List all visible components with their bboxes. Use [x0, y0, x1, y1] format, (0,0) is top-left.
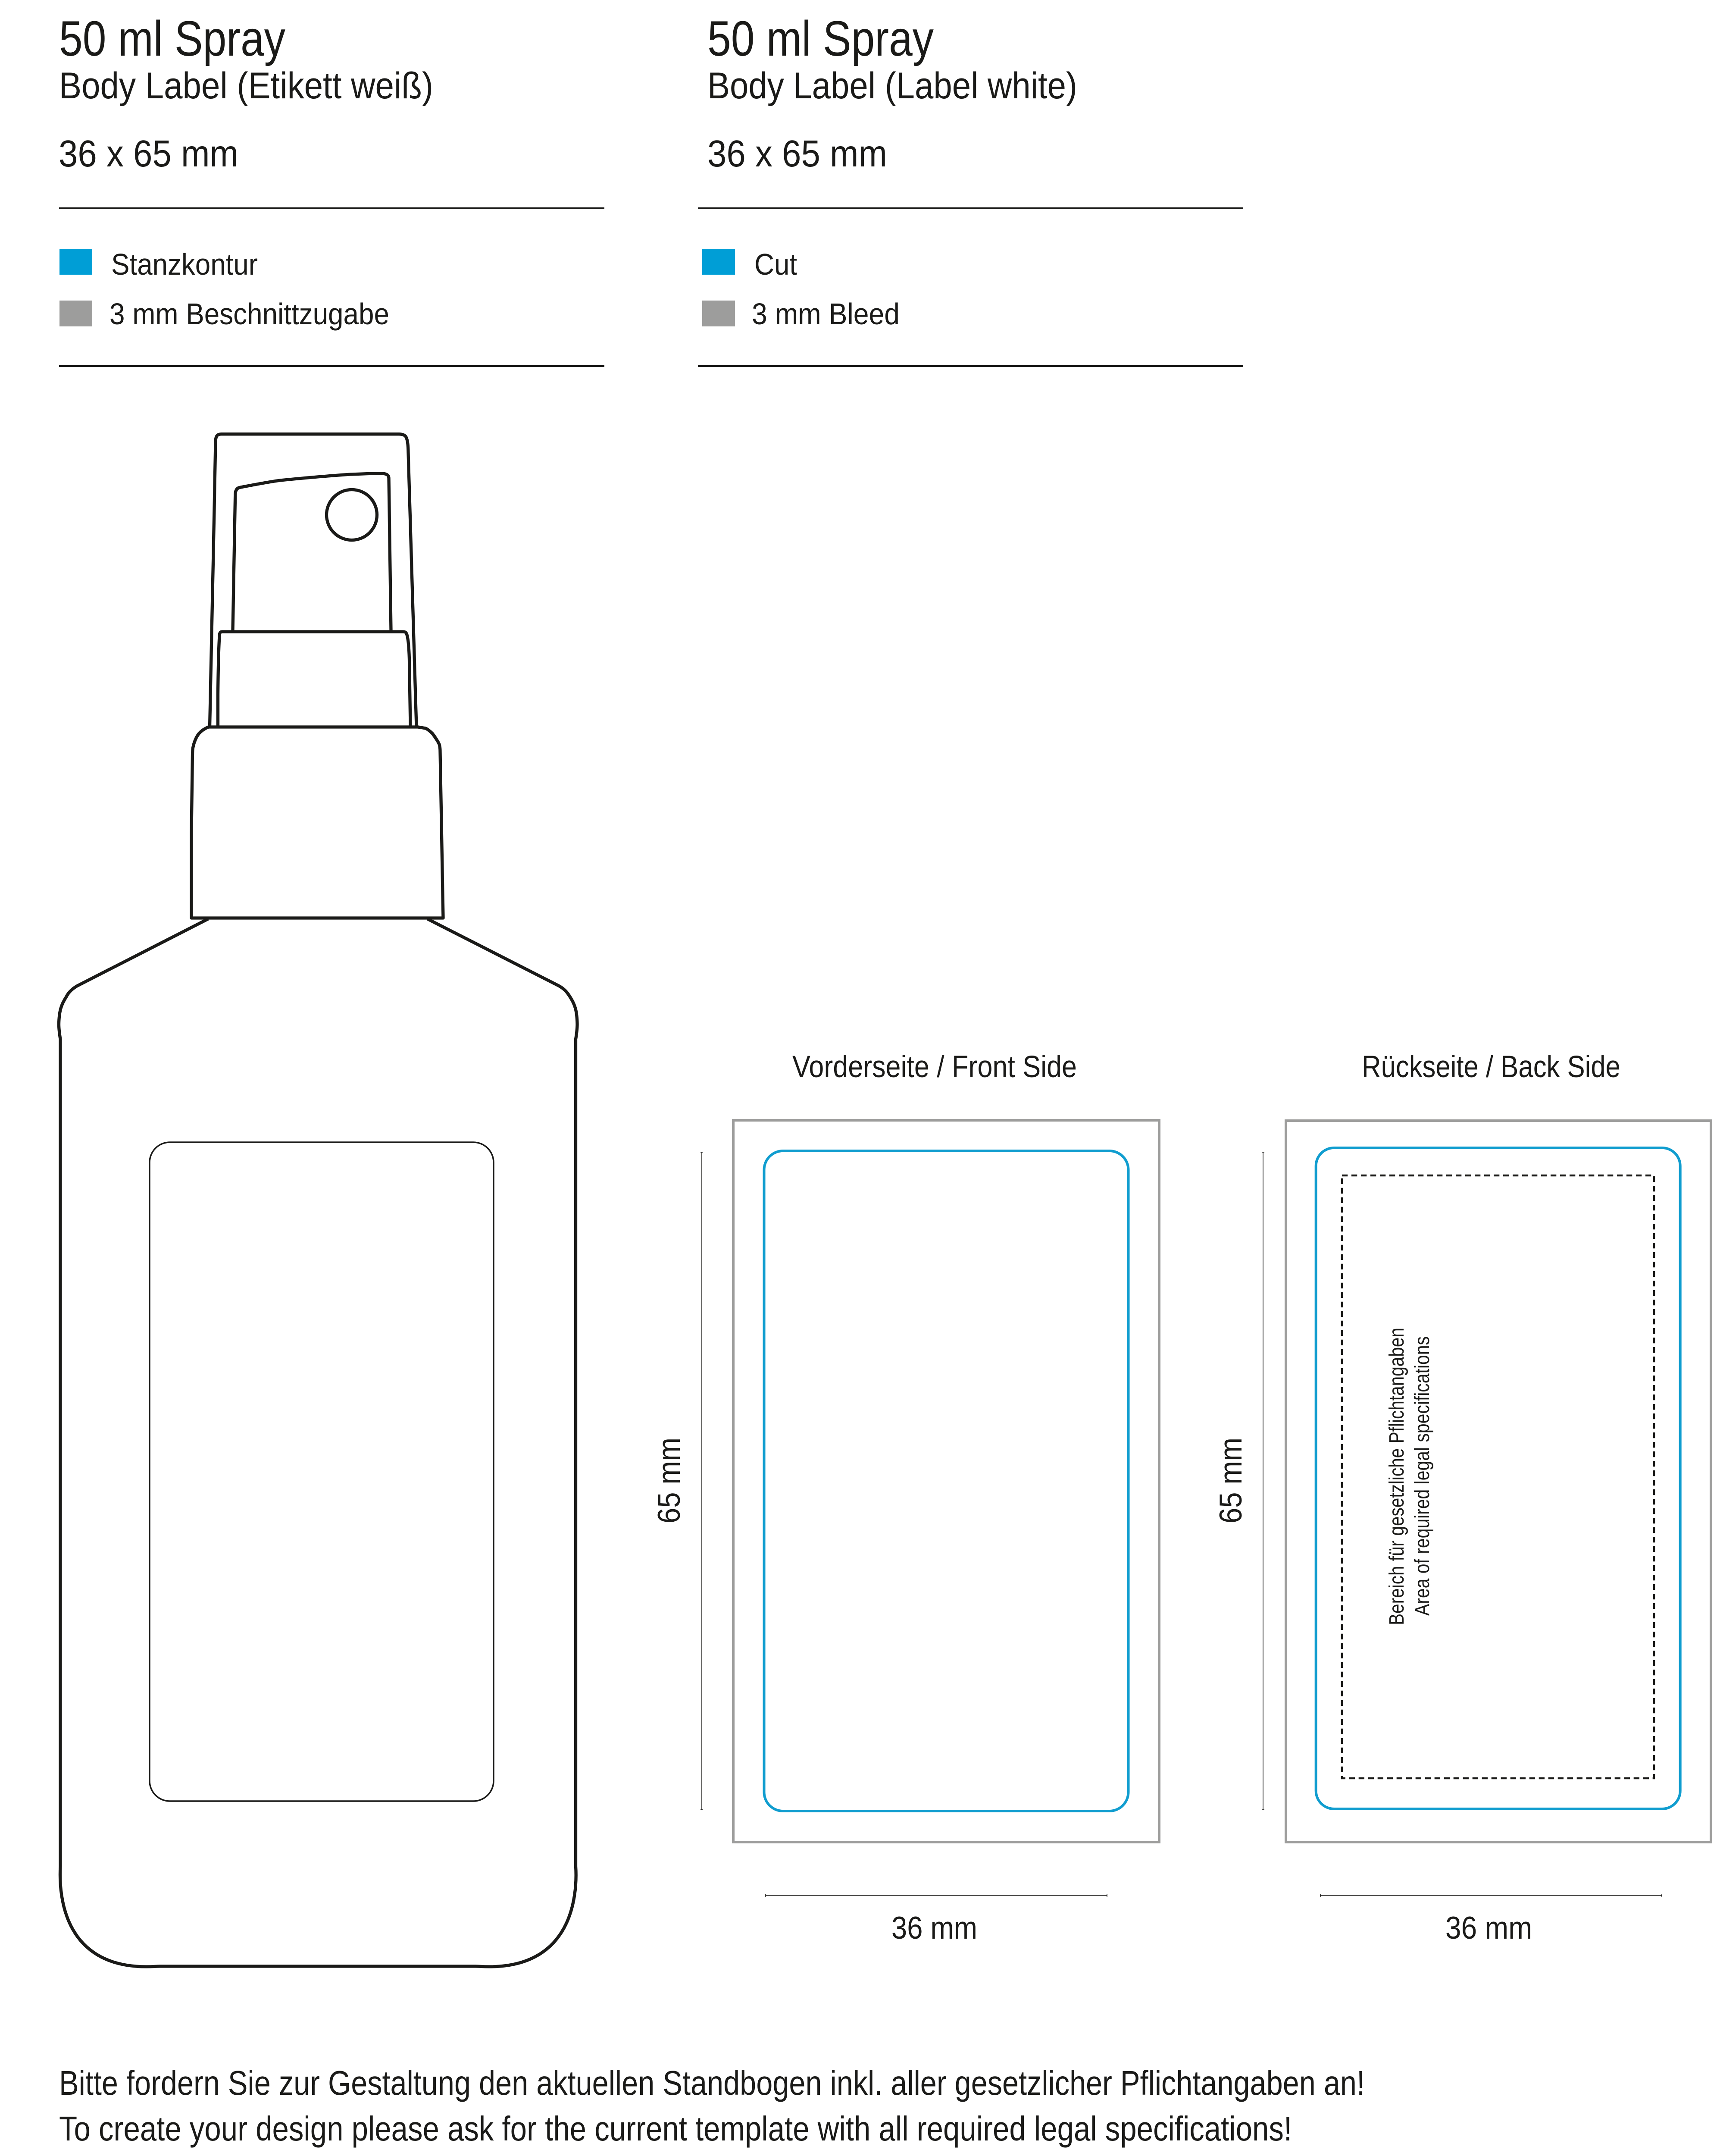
- legend label: Cut: Cut: [754, 248, 797, 281]
- title: 50 ml Spray (German): 50 ml Spray: [59, 11, 285, 66]
- cut contour: [764, 1151, 1129, 1811]
- bleed outline: [733, 1120, 1159, 1842]
- bottle: neck shroud: [191, 727, 443, 918]
- heading: Vorderseite / Front Side: Vorderseite / Front Side: [792, 1050, 1077, 1084]
- legend swatch: cut colour: [59, 249, 92, 275]
- cut contour: [1316, 1148, 1680, 1809]
- dimension: back width line: [1320, 1894, 1662, 1897]
- size text: 36 x 65 mm German: 36 x 65 mm: [59, 133, 238, 175]
- dimension: front width line: [766, 1894, 1107, 1897]
- footer note: Bitte fordern Sie zur Gestaltung den aktuellen Standbogen inkl. aller gesetzlicher Pflichtangaben an!: [59, 2064, 1365, 2102]
- bottle: nozzle opening: [327, 490, 377, 540]
- title: 50 ml Spray (English): 50 ml Spray: [707, 11, 934, 66]
- bottle: inner collar: [218, 632, 410, 727]
- bleed outline: [1286, 1121, 1711, 1842]
- mandatory information area: [1342, 1175, 1654, 1778]
- legend swatch: bleed colour: [702, 301, 735, 326]
- legend label: 3 mm Bleed: 3 mm Bleed: [752, 297, 900, 331]
- note: required legal area text: [1385, 1328, 1434, 1625]
- dimension label: 65 mm front: 65 mm: [652, 1438, 687, 1523]
- bottle: label area: [150, 1142, 494, 1801]
- panel: German specification header: [59, 11, 604, 366]
- panel: front label template: [733, 1120, 1159, 1842]
- heading: Rückseite / Back Side: Rückseite / Back Side: [1362, 1050, 1620, 1084]
- dimension label: 36 mm back: 36 mm: [1445, 1911, 1532, 1946]
- size text: 36 x 65 mm English: 36 x 65 mm: [707, 133, 887, 175]
- note: required legal area text: Bereich für gesetzliche Pflichtangaben: [1385, 1328, 1408, 1625]
- bottle: outer spray cap: [210, 434, 416, 727]
- panel: English specification header: [698, 11, 1243, 366]
- legend label: Stanzkontur: Stanzkontur: [111, 248, 258, 281]
- subtitle: Body Label English: Body Label (Label white): [707, 65, 1077, 107]
- dimension: back height line: [1262, 1152, 1264, 1810]
- bottle: spray actuator: [233, 473, 391, 630]
- icon: spray bottle outline: [59, 434, 577, 1967]
- legend swatch: bleed colour: [59, 301, 92, 326]
- legend swatch: cut colour: [702, 249, 735, 275]
- footer note: [59, 2064, 1365, 2148]
- note: required legal area text: Area of required legal specifications: [1411, 1336, 1434, 1616]
- legend label: 3 mm Beschnittzugabe: 3 mm Beschnittzugabe: [109, 297, 389, 331]
- dimension label: 36 mm front: 36 mm: [891, 1911, 977, 1946]
- footer note: To create your design please ask for the current template with all required legal specifications!: [59, 2109, 1292, 2148]
- bottle: body: [59, 919, 577, 1967]
- dimension: front height line: [701, 1152, 703, 1810]
- subtitle: Body Label German: Body Label (Etikett weiß): [59, 65, 433, 107]
- panel: back label template: [1286, 1121, 1711, 1842]
- dimension label: 65 mm back: 65 mm: [1213, 1438, 1248, 1523]
